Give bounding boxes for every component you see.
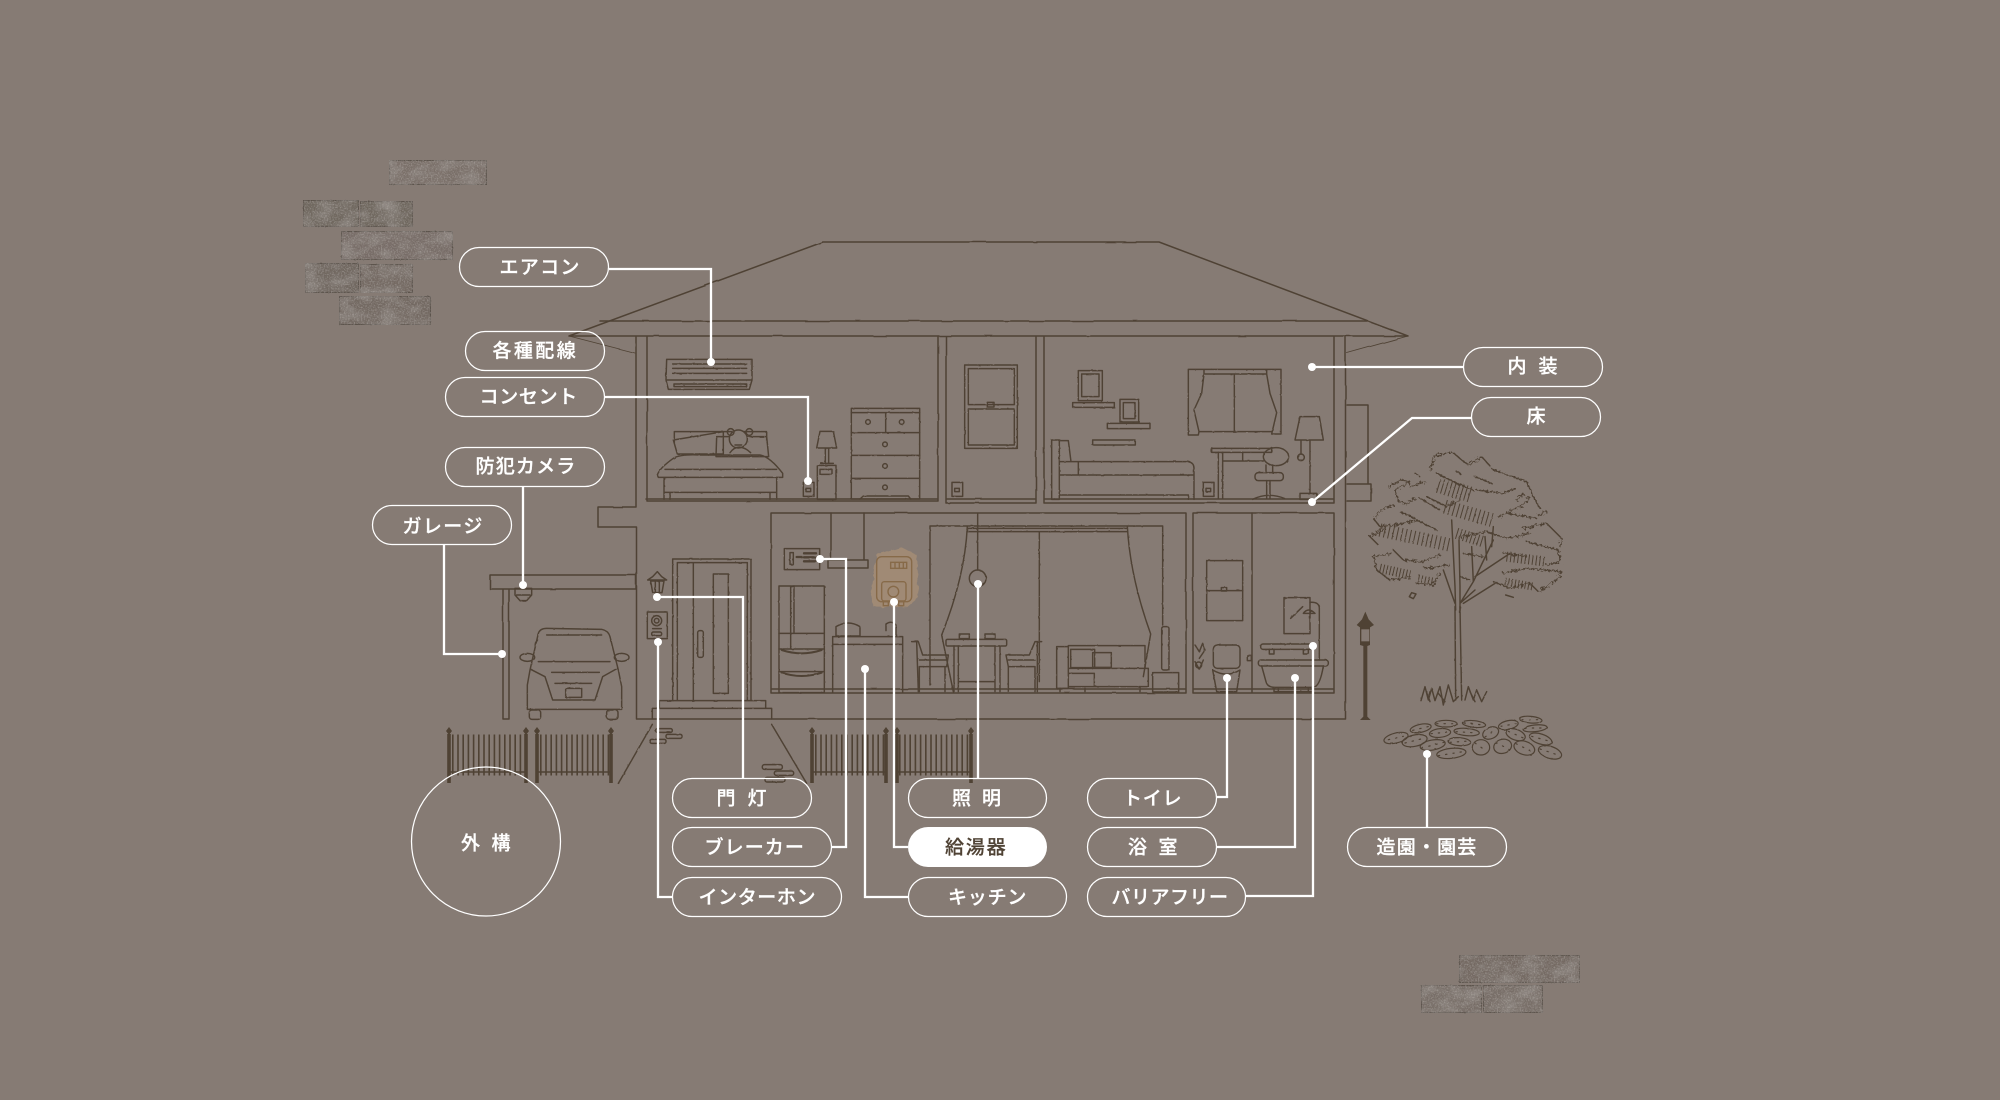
icon: desk and chair [1212, 448, 1289, 499]
label: ガレージ [372, 506, 512, 544]
icon: sofa [1057, 646, 1148, 692]
icon: tree [1370, 453, 1562, 610]
icon: pendant light [969, 513, 986, 587]
label: ガレージ: ガレージ [402, 516, 484, 538]
icon: window [965, 365, 1017, 448]
label: コンセント [446, 378, 604, 416]
icon: security camera [515, 588, 532, 601]
label: 内装 [1464, 348, 1602, 386]
toilet and bathroom [1195, 561, 1328, 692]
icon: toilet [1213, 645, 1240, 692]
right bedroom furniture [1052, 369, 1323, 499]
label: 床 [1472, 398, 1600, 436]
icon: breaker panel [784, 549, 820, 570]
icon: refrigerator [779, 586, 824, 693]
label: 門灯: 門灯 [716, 788, 779, 810]
icon: street lamp [1357, 612, 1374, 720]
label: 照明: 照明 [952, 788, 1012, 810]
highlight blob [871, 547, 918, 607]
leader lines [444, 269, 1471, 897]
label: エアコン: エアコン [500, 258, 581, 278]
label: コンセント: コンセント [480, 387, 578, 408]
living room [912, 513, 1179, 692]
label: 外構 circle: 外構 [461, 832, 522, 854]
icon: outlet room 2 [952, 482, 963, 496]
label: 床: 床 [1526, 406, 1547, 428]
label: バリアフリー [1088, 878, 1246, 916]
label: 給湯器 (active): 給湯器 [945, 836, 1007, 858]
label: 外構 circle [412, 767, 560, 916]
label: 門灯 [672, 778, 812, 818]
icon: curtained window [1188, 369, 1281, 435]
label: トイレ: トイレ [1123, 788, 1182, 810]
icon: pot and kitchen counter [833, 622, 903, 693]
house structure [490, 242, 1408, 719]
label: 各種配線 [466, 332, 604, 370]
bricks: bottom right [1422, 956, 1580, 1012]
label: 造園・園芸: 造園・園芸 [1376, 836, 1478, 858]
approach path [618, 724, 807, 783]
label: 造園・園芸 [1348, 828, 1506, 866]
label: ブレーカー: ブレーカー [704, 836, 805, 858]
leader dots [498, 358, 1431, 758]
label: インターホン [672, 878, 842, 916]
label: 浴室 [1088, 828, 1216, 866]
label: キッチン [908, 878, 1066, 916]
fence: left [446, 727, 614, 783]
tree trunk and grass [1421, 607, 1487, 705]
icon: outlet [803, 482, 814, 496]
icon: outlet [1203, 482, 1214, 496]
highlight: water heater [871, 547, 918, 607]
icon: plant [1195, 643, 1205, 669]
icon: picture frames and shelves [1073, 371, 1150, 445]
upper floor furniture [657, 359, 1017, 499]
label: 防犯カメラ: 防犯カメラ [476, 456, 577, 478]
icon: water heater [877, 557, 912, 606]
icon: window [1207, 561, 1243, 621]
label: バリアフリー: バリアフリー [1112, 886, 1229, 908]
label: 照明 [908, 778, 1046, 818]
icon: sofa bed [1052, 440, 1194, 499]
label: 内装: 内装 [1508, 356, 1570, 378]
icon: bed and bear [657, 429, 783, 499]
icon: side table and lamp [817, 431, 837, 499]
icon: front door and steps [652, 559, 772, 719]
icon: speaker and cabinet [1153, 627, 1179, 692]
tree branches [1443, 520, 1510, 610]
icon: curtains [930, 526, 1163, 692]
label: 防犯カメラ [446, 448, 604, 486]
tree hatching [1380, 485, 1547, 587]
label: インターホン: インターホン [698, 886, 816, 908]
icon: floor lamp [1295, 417, 1323, 499]
tree canopy [1370, 453, 1562, 592]
icon: car [520, 628, 629, 719]
icon: air conditioner [666, 359, 752, 389]
bricks: top left [304, 160, 486, 324]
icon: chest of drawers [851, 408, 920, 499]
icon: gate lamp [648, 572, 667, 593]
label: 浴室: 浴室 [1128, 836, 1189, 858]
label: 給湯器 (active) [908, 827, 1047, 867]
label: キッチン: キッチン [948, 888, 1027, 908]
icon: bath [1247, 598, 1328, 692]
label: エアコン [460, 248, 608, 286]
icon: stepping stones [1383, 715, 1563, 762]
label: ブレーカー [672, 828, 832, 866]
icon: intercom [647, 612, 667, 639]
icon: dining table and chairs [912, 634, 1042, 692]
fence: right [809, 727, 974, 783]
ground floor left: car, door, kitchen [515, 549, 903, 783]
label: 各種配線: 各種配線 [492, 340, 578, 362]
label: トイレ [1088, 778, 1216, 818]
